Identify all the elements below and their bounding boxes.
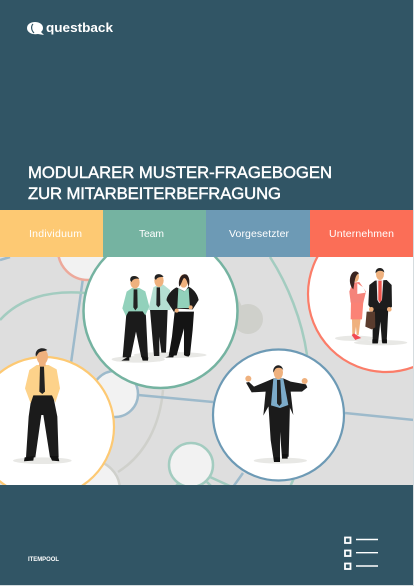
icon: checklist [345,538,378,569]
tab: Unternehmen [310,210,413,257]
circle: team [82,257,239,390]
title [28,163,332,203]
circle: manager [213,350,344,480]
small node circles [58,257,263,485]
category tabs [0,210,413,257]
title: ZUR MITARBEITERBEFRAGUNG [28,184,281,203]
figure: individual man in yellow shirt [13,348,72,464]
second man [148,274,171,356]
tab: Vorgesetzter: Vorgesetzter [229,228,290,240]
tab: Individuum: Individuum [29,228,82,240]
first man [121,276,149,361]
logo: questback: questback [46,20,114,35]
tab: Team [103,210,206,257]
title: MODULARER MUSTER-FRAGEBOGEN [28,163,332,182]
man in black suit [365,268,392,343]
network illustration panel [0,257,413,485]
footer band [0,485,413,585]
woman [165,274,199,357]
tab: Individuum [0,210,103,257]
cover header background [0,0,413,210]
tab: Team: Team [139,228,164,240]
circle: individual [0,357,114,497]
figure: manager with raised fists [245,365,308,464]
figure: team of three [112,274,207,363]
tab: Vorgesetzter [206,210,310,257]
woman in pink suit [349,271,366,340]
footer label: ITEMPOOL: ITEMPOOL [28,556,59,563]
figure: business couple [335,268,407,345]
circle: company [306,257,413,374]
tab: Unternehmen: Unternehmen [329,228,394,240]
